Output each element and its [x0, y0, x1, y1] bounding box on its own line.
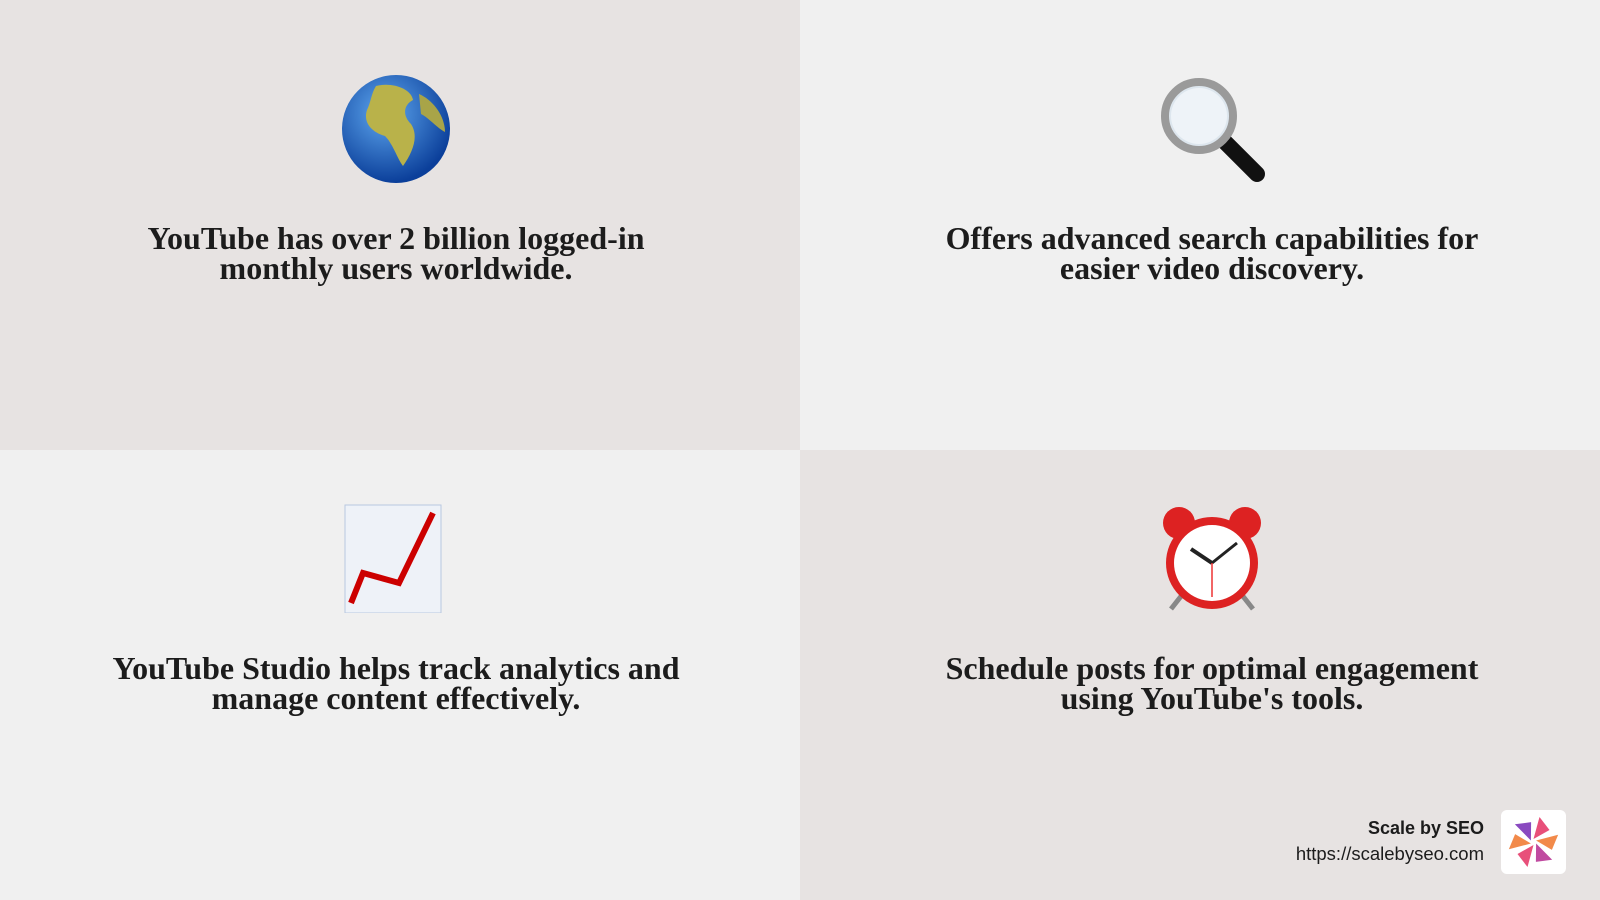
logo [1501, 810, 1566, 874]
text: search [946, 220, 1478, 286]
panel: schedule [800, 450, 1600, 900]
text: users [147, 220, 645, 286]
brand text: https://scalebyseo.com [1296, 843, 1484, 864]
text: schedule [946, 650, 1478, 716]
text: schedule: using YouTube's tools. [1061, 680, 1363, 716]
text: search: easier video discovery. [1060, 250, 1364, 286]
text: users: monthly users worldwide. [220, 250, 572, 286]
panel: users [0, 0, 800, 450]
icon: alarm clock [1163, 507, 1261, 610]
brand text: Scale by SEO [1368, 818, 1484, 838]
text: users: YouTube has over 2 billion logged-in [147, 220, 645, 256]
text: analytics: manage content effectively. [212, 680, 580, 716]
text: analytics [112, 650, 680, 716]
panel: search [800, 0, 1600, 450]
icon: chart [344, 504, 442, 613]
brand text [1296, 818, 1484, 864]
text: search: Offers advanced search capabilities for [946, 220, 1478, 256]
text: schedule: Schedule posts for optimal engagement [946, 650, 1478, 686]
panel: analytics [0, 450, 800, 900]
text: analytics: YouTube Studio helps track analytics and [112, 650, 679, 686]
icon: globe [342, 75, 450, 183]
icon: magnifier [1161, 78, 1265, 182]
